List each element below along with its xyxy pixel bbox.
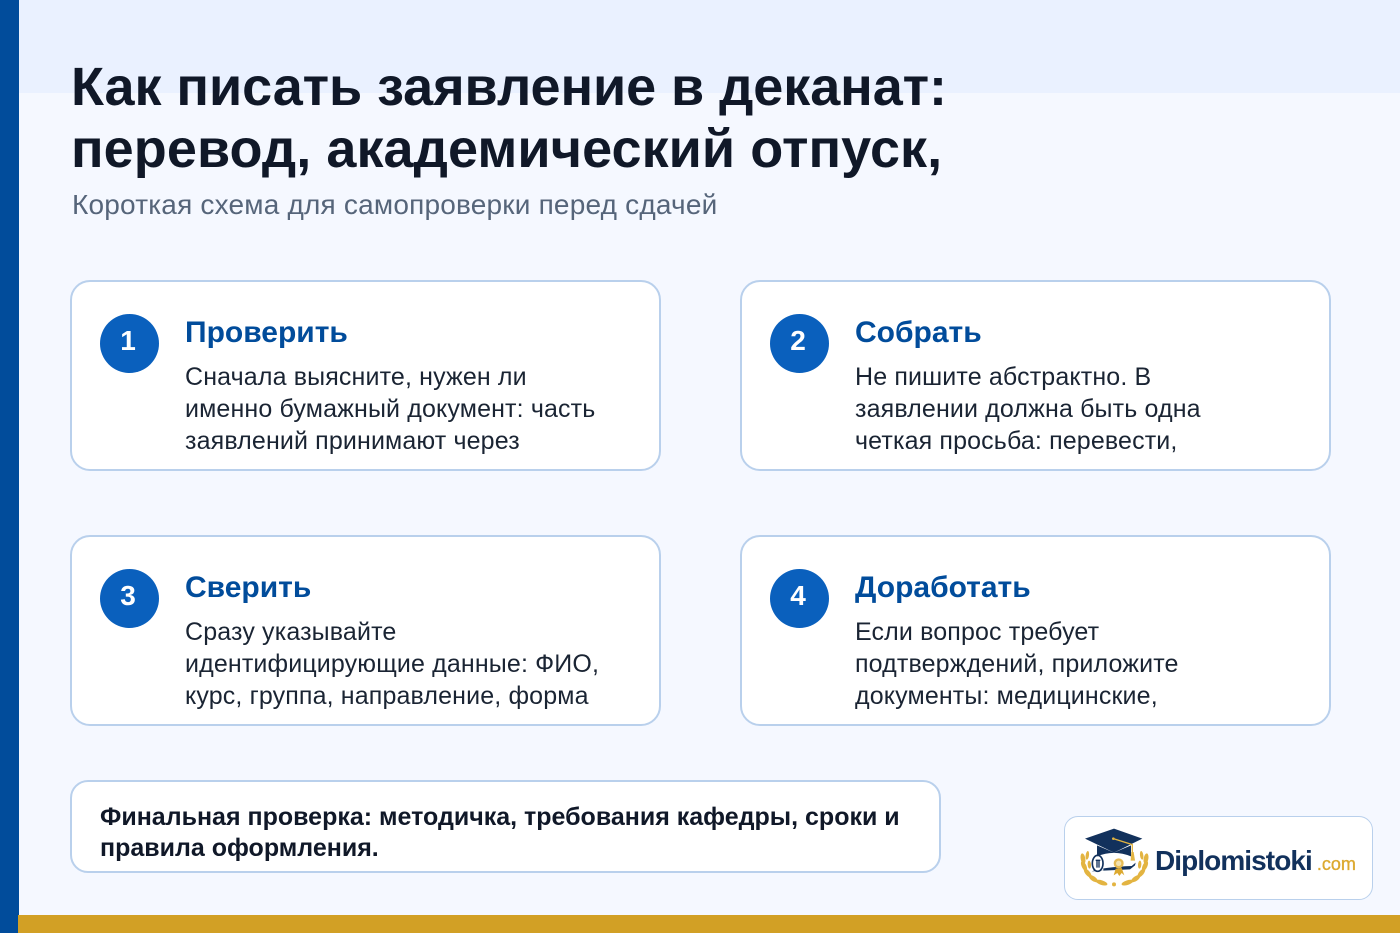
step 1 heading: Проверить (185, 316, 348, 349)
step 2 text (855, 363, 1201, 455)
header band (0, 0, 1400, 93)
step 3 text (185, 618, 599, 710)
left accent bar (0, 0, 19, 933)
step number 3 (100, 569, 159, 628)
step 4 text: подтверждений, приложите (855, 650, 1179, 678)
callout: final check (70, 780, 941, 873)
step 3 text: Сразу указывайте (185, 618, 396, 646)
step 3 text: курс, группа, направление, форма (185, 682, 589, 710)
subtitle: Короткая схема для самопроверки перед сдачей (72, 189, 717, 220)
step number 3: 3 (120, 580, 136, 611)
logo panel (1064, 816, 1373, 900)
step number 2 (770, 314, 829, 373)
step 4 heading: Доработать (855, 571, 1031, 604)
icon: graduation cap with laurel (1080, 828, 1148, 886)
panel: step 3 (70, 535, 661, 726)
step number 1: 1 (120, 325, 136, 356)
title: перевод, академический отпуск, (71, 119, 942, 179)
panel: step 2 (740, 280, 1331, 471)
callout text: правила оформления. (100, 834, 379, 862)
step 1 text: именно бумажный документ: часть (185, 395, 595, 423)
step 4 text: Если вопрос требует (855, 618, 1099, 646)
step 2 text: четкая просьба: перевести, (855, 427, 1178, 455)
step 2 heading: Собрать (855, 316, 982, 349)
callout text: Финальная проверка: методичка, требования кафедры, сроки и (100, 803, 900, 831)
bottom accent bar (18, 915, 1400, 933)
title: Как писать заявление в деканат: (71, 57, 947, 117)
step 2 text: заявлении должна быть одна (855, 395, 1201, 423)
step 1 text (185, 363, 595, 455)
title (71, 57, 947, 179)
panel: step 1 (70, 280, 661, 471)
callout text (100, 803, 900, 862)
logo wordmark: Diplomistoki .com (1155, 845, 1356, 876)
step number 1 (100, 314, 159, 373)
step number 4 (770, 569, 829, 628)
step 4 text: документы: медицинские, (855, 682, 1158, 710)
step 3 heading: Сверить (185, 571, 311, 604)
step 2 text: Не пишите абстрактно. В (855, 363, 1151, 391)
step 3 text: идентифицирующие данные: ФИО, (185, 650, 599, 678)
step 4 text (855, 618, 1179, 710)
panel: step 4 (740, 535, 1331, 726)
step number 2: 2 (790, 325, 806, 356)
step 1 text: Сначала выясните, нужен ли (185, 363, 527, 391)
step 1 text: заявлений принимают через (185, 427, 520, 455)
step number 4: 4 (790, 580, 806, 611)
